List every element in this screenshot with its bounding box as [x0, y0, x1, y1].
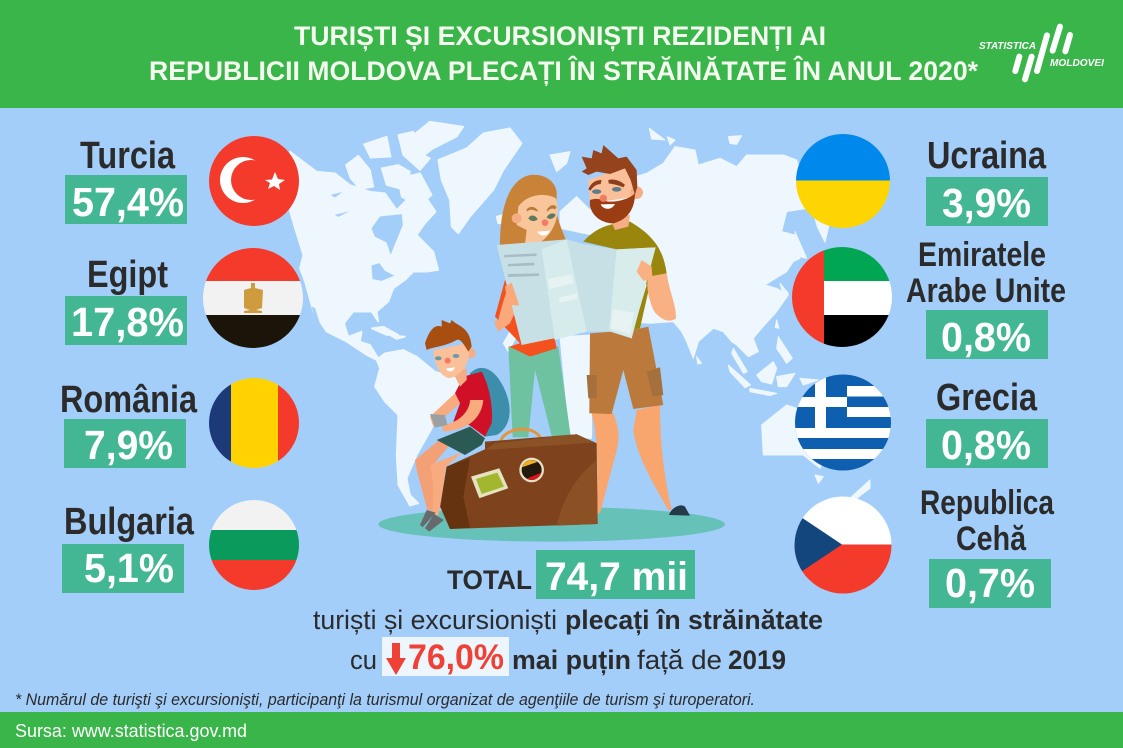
title: REPUBLICII MOLDOVA PLECAȚI ÎN STRĂINĂTATE ÎN ANUL 2020* — [149, 56, 979, 86]
illustration: family of tourists — [378, 145, 725, 542]
panel: Republica Cehă: Republica — [920, 484, 1055, 522]
total — [447, 550, 695, 599]
total: 74,7 mii — [545, 555, 688, 599]
open map — [497, 239, 656, 345]
panel: Emiratele Arabe Unite: Arabe Unite — [906, 272, 1066, 310]
footer bar: Sursa: www.statistica.gov.md — [15, 720, 247, 741]
title — [149, 21, 979, 86]
panel: Emiratele Arabe Unite: Emiratele — [918, 236, 1046, 274]
panel: Bulgaria — [62, 498, 305, 593]
header bar — [0, 0, 1123, 108]
world map — [290, 122, 870, 506]
backpack — [470, 368, 510, 437]
total: TOTAL — [447, 565, 532, 595]
change versus 2019: 76,0% — [408, 638, 504, 677]
panel: România — [60, 375, 304, 471]
panel: Republica Cehă: Cehă — [956, 520, 1027, 558]
title: TURIȘTI ȘI EXCURSIONIȘTI REZIDENȚI AI — [294, 21, 826, 51]
panel: Bulgaria: 5,1% — [84, 545, 174, 591]
panel: Emiratele Arabe Unite — [790, 236, 1066, 360]
panel: România: 7,9% — [84, 422, 173, 468]
panel: Egipt: Egipt — [87, 254, 168, 296]
panel: România: România — [60, 379, 198, 421]
logo: Statistica Moldovei — [979, 27, 1105, 79]
suitcase — [440, 429, 598, 529]
panel: Egipt: 17,8% — [71, 299, 184, 345]
panel: Emiratele Arabe Unite: 0,8% — [941, 314, 1031, 360]
panel: Bulgaria: Bulgaria — [64, 501, 195, 543]
panel: Republica Cehă: 0,7% — [945, 560, 1035, 606]
summary line: turiști și excursioniști — [313, 605, 557, 635]
change versus 2019: cu — [350, 645, 377, 675]
change versus 2019: 2019 — [728, 645, 786, 675]
panel: Turcia: Turcia — [80, 135, 176, 177]
ground ellipse — [378, 507, 725, 542]
panel: Grecia: 0,8% — [941, 422, 1031, 468]
panel: Turcia — [65, 135, 299, 226]
change versus 2019: mai puțin — [512, 645, 631, 675]
change versus 2019: față de — [637, 645, 722, 675]
change versus 2019 — [350, 637, 786, 677]
footer bar — [0, 712, 1123, 748]
panel: Egipt — [65, 245, 310, 351]
panel: Grecia — [790, 372, 1048, 474]
panel: Ucraina: 3,9% — [942, 180, 1031, 226]
panel: Turcia: 57,4% — [72, 179, 184, 225]
panel: Grecia: Grecia — [936, 377, 1038, 419]
man's arm and woman's hand — [505, 260, 676, 321]
woman — [494, 175, 571, 437]
summary line — [313, 605, 823, 635]
man — [582, 145, 690, 516]
panel: Republica Cehă — [780, 484, 1055, 608]
map seas: Hudson Bay, lakes, Gulf of California — [312, 192, 403, 327]
panel: Ucraina — [796, 134, 1048, 228]
logo: Statistica Moldovei: STATISTICA — [979, 40, 1036, 52]
boy — [415, 320, 492, 532]
panel: Ucraina: Ucraina — [927, 135, 1047, 177]
summary line: plecați în străinătate — [565, 605, 823, 635]
footnote: * Numărul de turişti şi excursionişti, participanţi la turismul organizat de agenţiile de turism şi turoperatori. — [15, 691, 755, 709]
logo: Statistica Moldovei: MOLDOVEI — [1050, 57, 1105, 69]
